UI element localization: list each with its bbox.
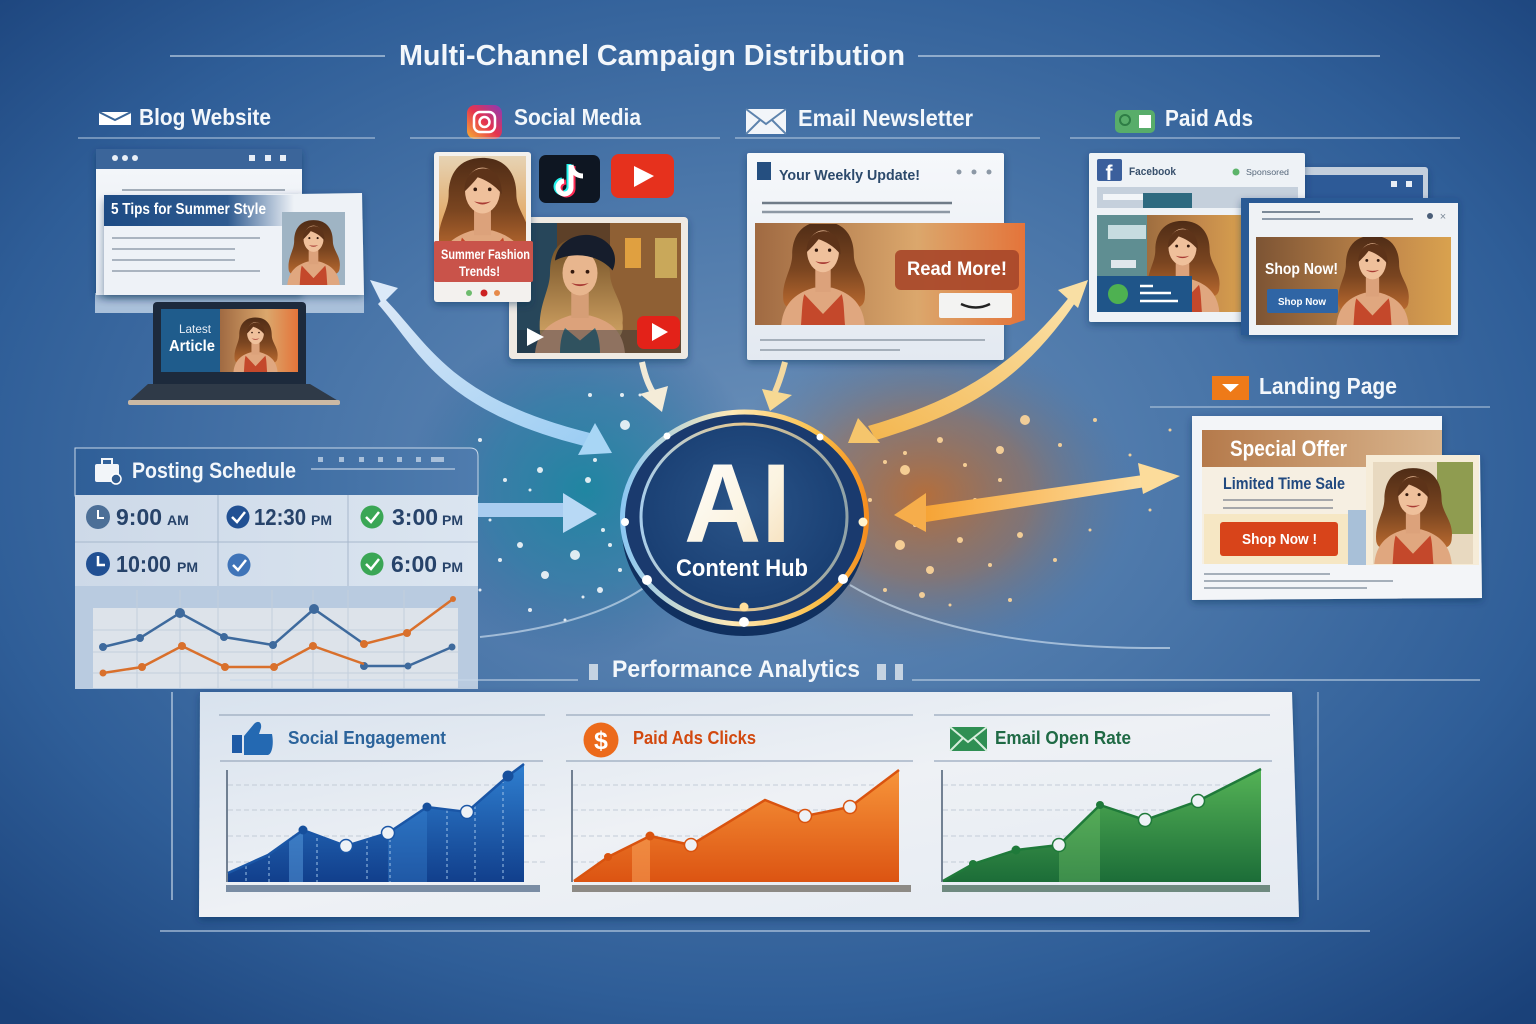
schedule table: PM (442, 559, 463, 575)
schedule table: PM (442, 512, 463, 528)
heading: Performance Analytics (230, 656, 1480, 683)
schedule table (75, 495, 478, 586)
heading: Landing Page: Landing Page (1259, 373, 1397, 399)
icon: dollar coin (584, 722, 618, 758)
arrow: schedule to hub (478, 493, 597, 533)
shop now ad: Shop Now (1278, 296, 1327, 308)
hub: AI Content Hub: Content Hub (676, 555, 808, 582)
heading: Email Newsletter: Email Newsletter (798, 105, 973, 131)
heading: Performance Analytics: Performance Analytics (612, 656, 860, 683)
heading: Landing Page (1150, 373, 1490, 407)
schedule table: 9:00 (116, 504, 162, 530)
schedule table: PM (177, 559, 198, 575)
arrow: social to hub (640, 362, 668, 412)
schedule heading (95, 457, 455, 484)
chart: email open rate: Email Open Rate (995, 728, 1131, 748)
icon: green envelope (950, 727, 987, 751)
arrow: landing page to hub (894, 463, 1180, 532)
arrow: hub to blog (370, 280, 612, 455)
schedule table: 3:00 (392, 504, 438, 530)
fashion card: Trends! (459, 264, 500, 279)
panel: landing page (1192, 416, 1482, 600)
icon: TikTok (539, 155, 600, 203)
panel: paid ads (1089, 153, 1458, 335)
heading: Paid Ads: Paid Ads (1165, 105, 1253, 131)
call to action (895, 250, 1019, 318)
panel: email newsletter (747, 153, 1025, 360)
schedule table: 12:30 (254, 504, 306, 530)
call to action: Read More! (907, 259, 1007, 280)
shop now ad: × (1440, 211, 1446, 223)
chart: paid ads clicks: Paid Ads Clicks (633, 728, 756, 748)
laptop: latest article (128, 302, 340, 405)
schedule line chart (75, 586, 478, 689)
arrow: paid ads to hub (848, 280, 1088, 443)
heading: Social Media (410, 104, 720, 139)
video card (509, 217, 688, 359)
panel: social media (434, 152, 688, 359)
facebook ad: f (1106, 162, 1114, 185)
schedule table: AM (167, 512, 189, 528)
panel: landing page: Limited Time Sale (1223, 474, 1345, 493)
icon: YouTube (611, 154, 674, 198)
panel: landing page: Special Offer (1230, 436, 1347, 461)
heading: Email Newsletter (735, 105, 1040, 138)
fashion card: Summer Fashion (441, 247, 530, 262)
schedule table: 10:00 (116, 551, 171, 577)
schedule table: PM (311, 512, 332, 528)
hub: AI Content Hub: AI (684, 441, 791, 566)
laptop: latest article: Article (169, 338, 215, 355)
schedule table: 6:00 (391, 551, 437, 577)
chart: paid ads clicks (566, 715, 913, 892)
facebook ad: Sponsored (1246, 167, 1289, 177)
chart: email open rate (934, 715, 1272, 892)
heading: Social Media: Social Media (514, 104, 641, 130)
panel: blog website (95, 149, 364, 313)
laptop: latest article: Latest (179, 322, 212, 336)
button: shop now (1220, 522, 1338, 556)
connector: faint curves from hub to analytics (480, 585, 1170, 648)
chart: social engagement: Social Engagement (288, 728, 446, 748)
title: Multi-Channel Campaign Distribution (399, 40, 905, 72)
email subject: Your Weekly Update! (779, 167, 920, 184)
hub: AI Content Hub (621, 412, 868, 636)
heading: Blog Website: Blog Website (139, 104, 271, 130)
schedule heading: Posting Schedule (132, 458, 296, 483)
shop now ad (1241, 198, 1458, 335)
panel: posting schedule (75, 448, 478, 689)
heading: Blog Website (78, 104, 375, 138)
blog headline: 5 Tips for Summer Style (111, 201, 266, 218)
particle glow field (405, 320, 1172, 660)
icon: dollar coin: $ (594, 727, 608, 755)
shop now ad: Shop Now! (1265, 261, 1338, 278)
button: shop now: Shop Now ! (1242, 532, 1317, 548)
arrow: email to hub (762, 362, 792, 411)
icon: thumbs up (232, 722, 273, 755)
heading: Paid Ads (1070, 105, 1460, 138)
fashion card (434, 152, 533, 302)
facebook ad (1089, 153, 1305, 322)
facebook ad: Facebook (1129, 166, 1177, 178)
chart: social engagement (219, 715, 548, 892)
panel: performance analytics (172, 692, 1318, 917)
